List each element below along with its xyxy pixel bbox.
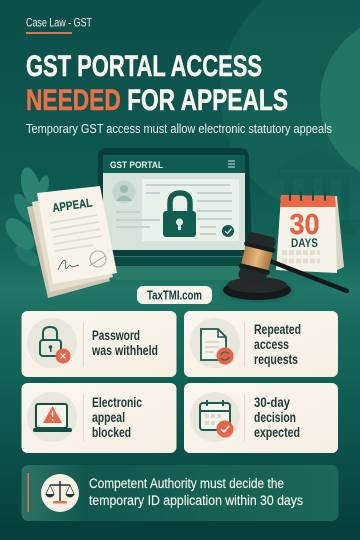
title: NEEDED FOR APPEALS <box>26 84 288 117</box>
text: Electronic <box>92 395 142 410</box>
text: was withheld <box>91 343 158 358</box>
card: password withheld <box>22 311 176 377</box>
portal screen: GST PORTAL <box>110 160 163 170</box>
calendar: 30 days: DAYS <box>291 236 318 250</box>
icon: calendar check <box>200 400 234 438</box>
TaxTMI badge: TaxTMI.com <box>147 288 202 302</box>
text: Repeated <box>254 322 301 337</box>
icon: check badge <box>222 225 234 237</box>
text <box>254 395 300 440</box>
icon: leaves <box>0 165 51 270</box>
bottom banner <box>22 465 338 521</box>
text <box>89 476 303 508</box>
icon: document with refresh <box>201 329 234 364</box>
calendar: 30 days <box>276 192 344 273</box>
icon: padlock <box>163 193 196 237</box>
card: electronic appeal blocked <box>22 383 176 453</box>
TaxTMI badge <box>137 286 212 304</box>
text <box>254 322 301 367</box>
icon: laptop warning <box>33 404 72 432</box>
header label <box>26 16 92 34</box>
text: Password <box>92 328 140 343</box>
text: requests <box>254 352 298 367</box>
text: blocked <box>92 425 131 440</box>
text <box>92 395 142 440</box>
icon: courthouse backdrop <box>272 148 356 234</box>
text: expected <box>254 425 300 440</box>
text: appeal <box>92 410 125 425</box>
card: repeated access requests <box>184 311 338 377</box>
appeal document: APPEAL <box>51 196 93 215</box>
text: 30-day <box>254 395 290 410</box>
text: access <box>254 337 289 352</box>
calendar: 30 days: 30 <box>290 209 320 241</box>
laptop <box>98 148 272 280</box>
title <box>26 50 288 117</box>
portal screen <box>103 155 245 250</box>
text: temporary ID application within 30 days <box>89 493 303 508</box>
header label: Case Law - GST <box>26 16 92 30</box>
title: GST PORTAL ACCESS <box>26 50 262 83</box>
text: Competent Authority must decide the <box>89 476 284 491</box>
icon: scales of justice <box>41 474 79 512</box>
text: decision <box>254 410 296 425</box>
icon: padlock with x <box>40 327 70 364</box>
card: 30-day decision expected <box>184 383 338 453</box>
appeal document <box>27 186 117 298</box>
text <box>91 328 158 358</box>
gavel <box>222 231 347 301</box>
